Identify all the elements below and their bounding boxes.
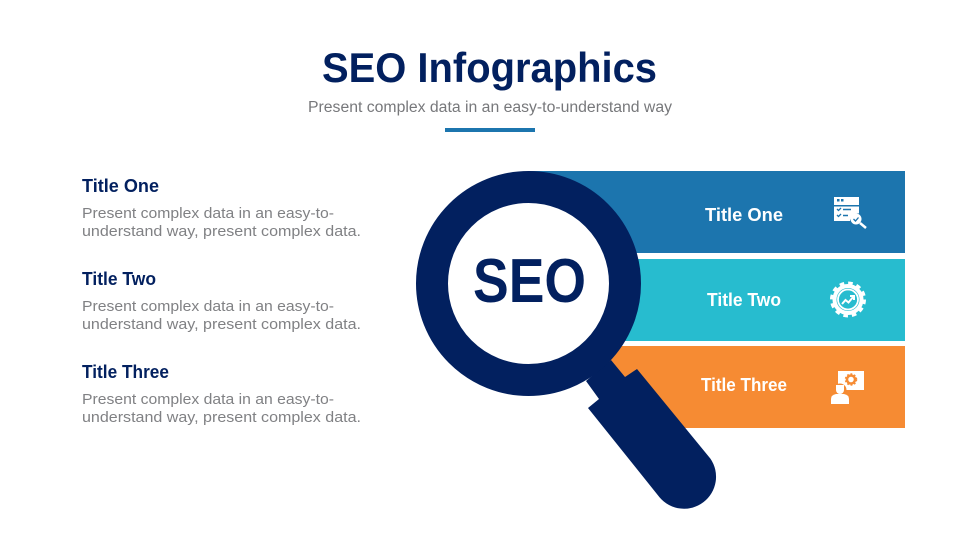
magnifier handle bbox=[586, 360, 716, 509]
text block: title three bbox=[82, 362, 361, 426]
icon: presenter with gear board bbox=[831, 371, 864, 404]
text block: title one: Present complex data in an easy-to- bbox=[82, 205, 334, 222]
text block: title three: Present complex data in an easy-to- bbox=[82, 391, 334, 408]
text block: title one bbox=[82, 176, 361, 240]
title: SEO Infographics bbox=[322, 44, 657, 91]
magnifier lens bbox=[432, 187, 625, 380]
text block: title two: Present complex data in an easy-to- bbox=[82, 298, 334, 315]
text block: title one: understand way, present complex data. bbox=[82, 223, 361, 240]
bar: title two: Title Two bbox=[707, 290, 781, 310]
text block: title two: understand way, present complex data. bbox=[82, 316, 361, 333]
title underline bbox=[445, 128, 535, 132]
bar: title one: Title One bbox=[705, 205, 783, 225]
text block: title one: Title One bbox=[82, 176, 159, 196]
text block: title two bbox=[82, 269, 361, 333]
lens label: SEO bbox=[473, 247, 586, 316]
text block: title two: Title Two bbox=[82, 269, 156, 289]
bar: title two bbox=[600, 259, 905, 341]
bar: title three: Title Three bbox=[701, 375, 787, 395]
bar: title three bbox=[605, 346, 905, 428]
subtitle: Present complex data in an easy-to-understand way bbox=[308, 99, 672, 116]
magnifying glass bbox=[432, 187, 716, 509]
text block: title three: Title Three bbox=[82, 362, 169, 382]
icon: checklist with magnifier bbox=[834, 197, 866, 228]
bar: title one bbox=[528, 171, 905, 253]
icon: gear with growth arrow bbox=[832, 284, 864, 316]
text block: title three: understand way, present complex data. bbox=[82, 409, 361, 426]
